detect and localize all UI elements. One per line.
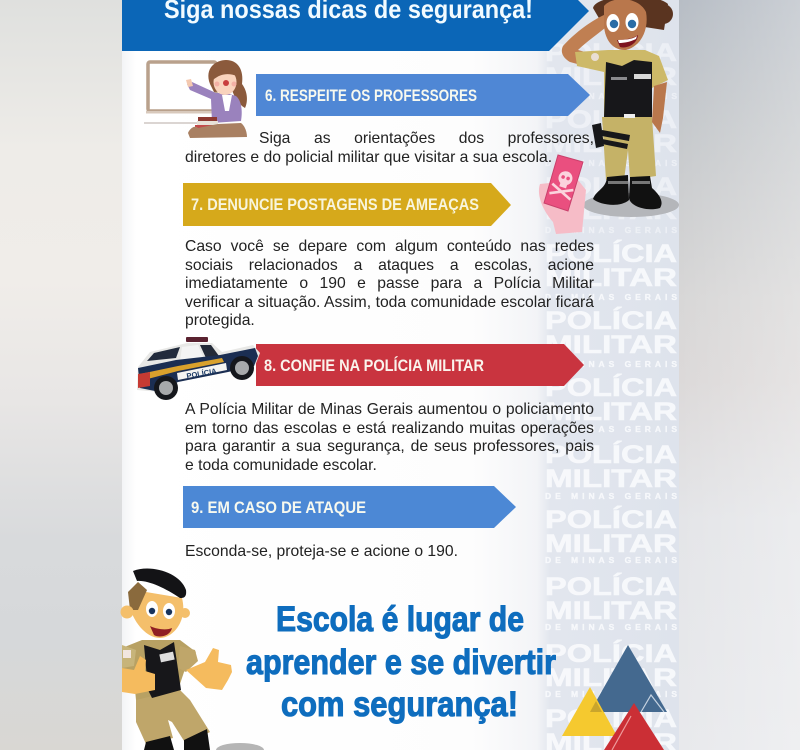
watermark: Polícia Militar repeated lower part: DE MINAS GERAIS — [545, 622, 677, 632]
closing slogan: aprender e se divertir — [246, 643, 556, 682]
header banner — [122, 0, 589, 51]
text block: tip 8: em torno das escolas e está realizando muitas operações — [185, 420, 594, 437]
watermark: Polícia Militar repeated upper faint part — [545, 38, 677, 235]
section banner 9: 9. EM CASO DE ATAQUE — [191, 499, 366, 517]
watermark: Polícia Militar repeated upper faint part: DE MINAS GERAIS — [545, 225, 677, 235]
watermark: Polícia Militar repeated lower part: POLÍCIA — [545, 306, 677, 335]
text block: tip 7: sociais relacionados a ataques a escolas, acione — [185, 257, 594, 274]
watermark: Polícia Militar repeated upper faint part: MILITAR — [545, 130, 677, 158]
watermark: Polícia Militar repeated lower part: POLÍCIA — [545, 704, 677, 733]
watermark: Polícia Militar repeated lower part: MILITAR — [545, 597, 677, 625]
watermark: Polícia Militar repeated lower part — [545, 239, 677, 750]
section banner 8 — [256, 344, 584, 386]
watermark: Polícia Militar repeated lower part: DE MINAS GERAIS — [545, 491, 677, 501]
watermark: Polícia Militar repeated lower part: DE MINAS GERAIS — [545, 359, 677, 369]
watermark: Polícia Militar repeated upper faint part: POLÍCIA — [545, 172, 677, 201]
watermark: Polícia Militar repeated lower part: POLÍCIA — [545, 639, 677, 668]
text block: tip 7: verificar a situação. Assim, toda comunidade escolar ficará — [185, 294, 594, 311]
section banner 8: 8. CONFIE NA POLÍCIA MILITAR — [264, 356, 484, 375]
text block: tip 9: Esconda-se, proteja-se e acione o 190. — [185, 543, 458, 560]
watermark: Polícia Militar repeated lower part: MILITAR — [545, 398, 677, 426]
panel: poster sheet — [122, 0, 679, 750]
watermark: Polícia Militar repeated lower part: MILITAR — [545, 264, 677, 292]
section banner 9 — [183, 486, 516, 528]
icon: Minas triangles logo — [562, 645, 667, 750]
text block: tip 8: e toda comunidade escolar. — [185, 457, 377, 474]
watermark: Polícia Militar repeated lower part: DE MINAS GERAIS — [545, 689, 677, 699]
icon: police car — [137, 337, 260, 400]
watermark: Polícia Militar repeated upper faint part: MILITAR — [545, 63, 677, 91]
watermark: Polícia Militar repeated lower part: POLÍCIA — [545, 505, 677, 534]
watermark: Polícia Militar repeated upper faint part: DE MINAS GERAIS — [545, 158, 677, 168]
watermark: Polícia Militar repeated upper faint part: DE MINAS GERAIS — [545, 91, 677, 101]
text block: tip 7 — [185, 238, 594, 329]
watermark: Polícia Militar repeated lower part: POLÍCIA — [545, 373, 677, 402]
section banner 7 — [183, 183, 511, 226]
watermark: Polícia Militar repeated lower part: POLÍCIA — [545, 572, 677, 601]
section banner 6: 6. RESPEITE OS PROFESSORES — [265, 87, 477, 105]
text block: tip 8: A Polícia Militar de Minas Gerais aumentou o policiamento — [185, 401, 594, 418]
page background right — [679, 0, 800, 750]
watermark: Polícia Militar repeated lower part: POLÍCIA — [545, 239, 677, 268]
watermark: Polícia Militar repeated upper faint part: POLÍCIA — [545, 38, 677, 67]
section banner 7: 7. DENUNCIE POSTAGENS DE AMEAÇAS — [191, 196, 479, 214]
icon: phone with skull — [539, 155, 586, 234]
closing slogan: com segurança! — [281, 685, 518, 724]
icon: policeman giving thumbs up — [120, 568, 264, 750]
section banner 6 — [256, 74, 590, 116]
watermark: Polícia Militar repeated upper faint part: POLÍCIA — [545, 105, 677, 134]
text block: tip 6: diretores e do policial militar que visitar a sua escola. — [185, 149, 552, 166]
text block: tip 7: protegida. — [185, 312, 255, 329]
text block: tip 7: Caso você se depare com algum conteúdo nas redes — [185, 238, 594, 255]
text block: tip 6 — [185, 130, 594, 166]
icon: police car: POLÍCIA — [186, 366, 218, 381]
watermark: Polícia Militar repeated upper faint part: MILITAR — [545, 197, 677, 225]
text block: tip 8 — [185, 401, 594, 474]
closing slogan — [246, 600, 556, 724]
watermark: Polícia Militar repeated lower part: MILITAR — [545, 530, 677, 558]
watermark: Polícia Militar repeated lower part: MILITAR — [545, 664, 677, 692]
closing slogan: Escola é lugar de — [276, 600, 524, 639]
watermark: Polícia Militar repeated lower part: DE MINAS GERAIS — [545, 292, 677, 302]
watermark: Polícia Militar repeated lower part: DE MINAS GERAIS — [545, 424, 677, 434]
watermark: Polícia Militar repeated lower part: MILITAR — [545, 331, 677, 359]
text block: tip 8: para garantir a sua segurança, de seus professores, pais — [185, 438, 594, 455]
watermark: Polícia Militar repeated lower part: DE MINAS GERAIS — [545, 555, 677, 565]
watermark: Polícia Militar repeated lower part: POLÍCIA — [545, 440, 677, 469]
icon: saluting policewoman — [562, 0, 679, 217]
text block: tip 7: imediatamente o 190 e passe para a Polícia Militar — [185, 275, 594, 292]
watermark: Polícia Militar repeated lower part: MILITAR — [545, 465, 677, 493]
text block: tip 6: Siga as orientações dos professores, — [259, 130, 594, 147]
page background left — [0, 0, 122, 750]
icon: teacher at blackboard — [144, 60, 247, 138]
